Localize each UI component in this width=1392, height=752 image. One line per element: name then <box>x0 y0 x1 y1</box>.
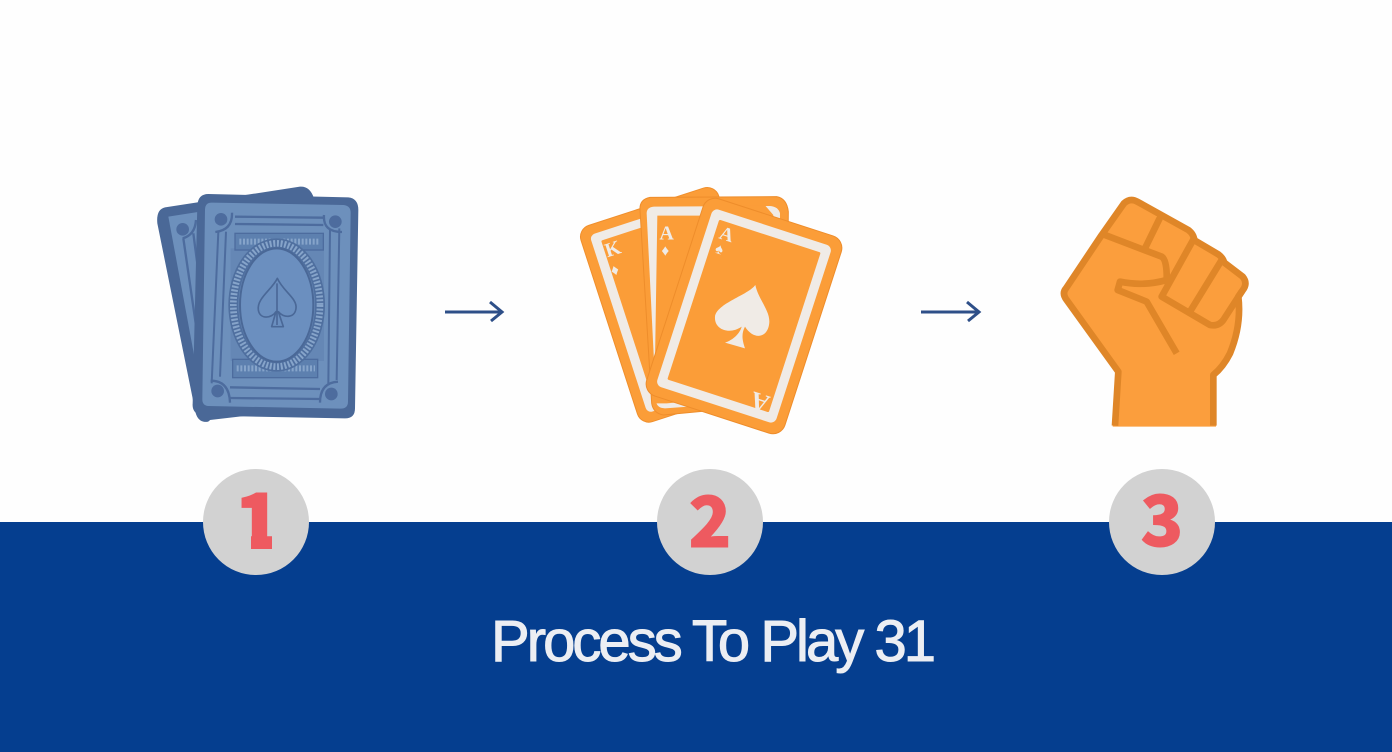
card letter: left: K <box>602 236 624 262</box>
icon: orange playing cards <box>577 184 845 437</box>
step 1 badge <box>203 461 309 575</box>
fist outline <box>1064 200 1245 426</box>
card left <box>577 184 779 425</box>
icon: blue card backs <box>157 187 358 422</box>
icon: raised fist <box>1064 200 1245 427</box>
fist body fill <box>1064 200 1245 427</box>
step 1 badge: 1 <box>235 461 281 570</box>
back card <box>157 187 353 422</box>
oval medallion <box>240 248 313 362</box>
centre spade <box>715 285 769 348</box>
step 2 badge: 2 <box>689 467 731 568</box>
icon: orange playing cards: ♦ <box>609 261 622 280</box>
corner label top: A <box>717 223 736 247</box>
arrow 1 <box>445 302 502 321</box>
card letter: middle: A <box>659 222 674 244</box>
arrow 2 <box>921 302 979 321</box>
ornate panels <box>231 248 324 361</box>
spade outline <box>258 278 296 327</box>
corner medallions <box>215 213 227 226</box>
step 3 badge <box>1109 466 1215 575</box>
footer band <box>0 522 1392 752</box>
corner label bottom: A <box>746 385 773 418</box>
step 3 badge: 3 <box>1141 466 1183 567</box>
step 2 badge <box>657 467 763 575</box>
card front: ♠ <box>713 241 726 259</box>
icon: orange playing cards: ♦ <box>661 242 669 259</box>
card middle <box>640 197 788 415</box>
card front <box>643 195 845 437</box>
title: Process To Play 31 <box>491 609 936 674</box>
front card <box>193 194 358 418</box>
